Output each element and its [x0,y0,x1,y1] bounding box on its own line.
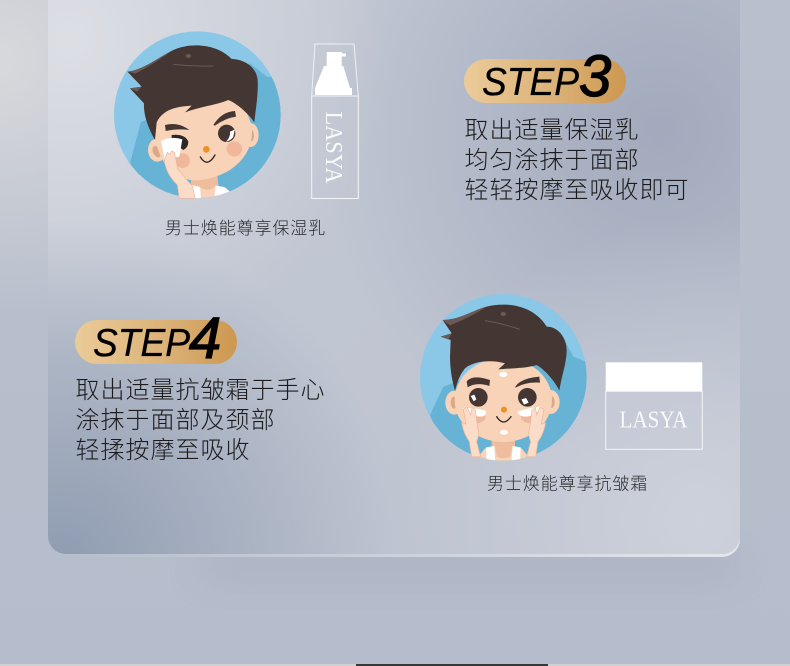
step 4 instructions: 轻揉按摩至吸收 [76,437,250,464]
step 3 badge: STEP [482,61,579,104]
caption: lotion: 男士焕能尊享保湿乳 [165,219,326,238]
label: LASYA on bottle: LASYA [320,112,346,184]
illustration: man applying cream to face [420,294,590,467]
step 3 badge [464,44,626,109]
next section edge [0,664,790,666]
step 3 badge: 3 [579,44,611,109]
step 4 badge: STEP [93,322,190,365]
caption: cream: 男士焕能尊享抗皱霜 [487,474,648,494]
step 3 instructions: 取出适量保湿乳 [464,117,640,144]
step 4 instructions: 取出适量抗皱霜于手心 [76,377,326,404]
step 4 badge [75,306,237,371]
step 3 instructions [464,117,690,204]
product: LASYA lotion bottle [312,44,358,198]
step 3 instructions: 均匀涂抹于面部 [464,147,640,174]
step 4 badge: 4 [189,306,221,371]
panel: glass card [48,0,740,557]
step 4 instructions: 涂抹于面部及颈部 [76,407,276,434]
label: LASYA on jar: LASYA [620,408,688,434]
step 3 instructions: 轻轻按摩至吸收即可 [464,177,690,204]
step 4 instructions [76,377,326,464]
illustration: man dabbing lotion with cotton pad [114,31,287,202]
product: LASYA cream jar [606,362,702,449]
